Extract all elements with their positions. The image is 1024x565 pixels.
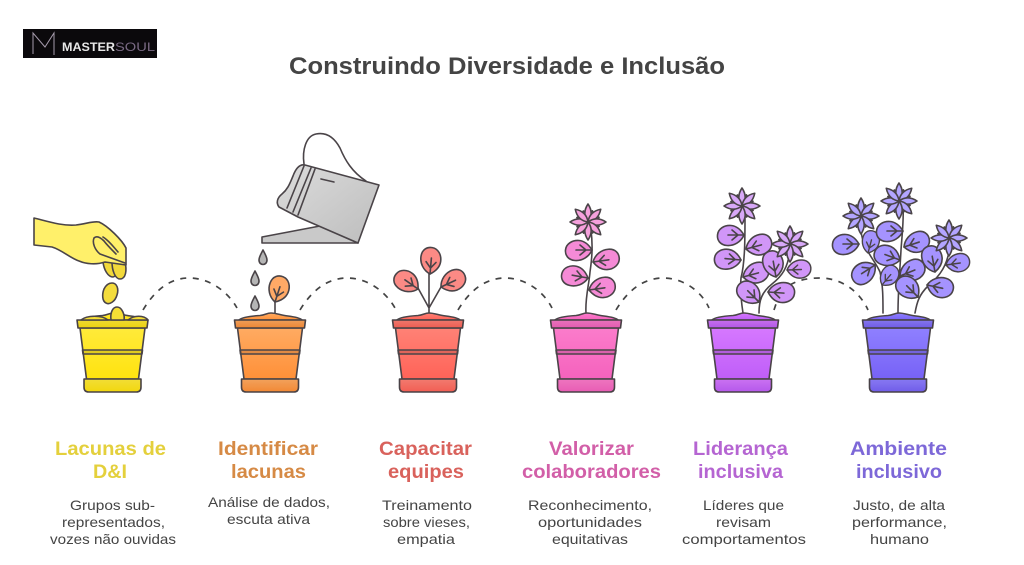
text block: Identificar lacunas: Identificar	[218, 439, 319, 460]
dashed connector arcs	[143, 278, 868, 310]
plant: blue stems with leaves	[832, 205, 971, 313]
pot: blue	[862, 313, 934, 392]
icon: falling seed	[103, 283, 118, 304]
plant: three-leaf seedling	[390, 247, 469, 313]
icon: pink flower	[570, 204, 606, 240]
text block: Valorizar colaboradores: oportunidades	[538, 514, 642, 530]
text block: Valorizar colaboradores: colaboradores	[522, 462, 661, 483]
text block: Ambiente inclusivo: Ambiente	[850, 439, 947, 460]
title: Construindo Diversidade e Inclusão	[289, 53, 725, 80]
logo: MASTER	[62, 42, 116, 54]
step 6: three-stem plant in blue pot	[832, 183, 971, 392]
plant: violet stems with leaves	[714, 215, 811, 313]
pot: yellow	[77, 313, 148, 392]
text block: Identificar lacunas: Análise de dados,	[208, 494, 330, 510]
icon: water drops	[251, 250, 267, 310]
text block: Liderança inclusiva: Liderança	[693, 439, 788, 460]
text block: Capacitar equipes: empatia	[397, 531, 455, 547]
text block: Valorizar colaboradores: Reconhecimento,	[528, 497, 652, 513]
pot: violet	[708, 313, 778, 392]
text block: Identificar lacunas	[208, 439, 330, 527]
text block: Lacunas de D&I: D&I	[93, 462, 127, 483]
icon: hand dropping seeds	[34, 218, 126, 279]
icon: violet flowers	[724, 188, 808, 262]
plant: pink stem with leaves	[560, 230, 621, 313]
step 1: hand and seeds over yellow pot	[34, 218, 148, 392]
text block: Ambiente inclusivo: humano	[870, 531, 929, 547]
text block: Lacunas de D&I	[50, 439, 176, 547]
text block: Identificar lacunas: escuta ativa	[227, 511, 310, 527]
text block: Ambiente inclusivo: inclusivo	[856, 462, 942, 483]
text block: Ambiente inclusivo	[850, 439, 947, 547]
logo	[23, 29, 157, 58]
text block: Lacunas de D&I: vozes não ouvidas	[50, 531, 176, 547]
pot: orange	[234, 313, 306, 392]
text block: Liderança inclusiva: inclusiva	[698, 462, 783, 483]
sprout	[265, 273, 292, 313]
text block: Liderança inclusiva: revisam	[716, 514, 771, 530]
text block: Capacitar equipes: equipes	[388, 462, 464, 483]
step 3: seedling in red pot	[390, 247, 469, 392]
text block: Capacitar equipes: Capacitar	[379, 439, 473, 460]
step 5: two-stem plant in violet pot	[708, 188, 811, 392]
logo: SOUL	[115, 42, 156, 54]
text block: Liderança inclusiva	[682, 439, 806, 547]
pot: pink	[550, 313, 622, 392]
text block: Liderança inclusiva: Líderes que	[703, 497, 784, 513]
icon: soil seeds	[81, 307, 148, 320]
text block: Lacunas de D&I: Grupos sub-	[70, 497, 155, 513]
text block: Valorizar colaboradores: Valorizar	[549, 439, 635, 460]
text block: Liderança inclusiva: comportamentos	[682, 531, 806, 547]
text block: Valorizar colaboradores	[522, 439, 661, 547]
pot: red	[392, 313, 464, 392]
text block: Ambiente inclusivo: performance,	[852, 514, 947, 530]
text block: Identificar lacunas: lacunas	[231, 462, 306, 483]
text block: Lacunas de D&I: representados,	[62, 514, 165, 530]
text block: Lacunas de D&I: Lacunas de	[55, 439, 166, 460]
text block: Capacitar equipes: sobre vieses,	[383, 514, 470, 530]
icon: blue flowers	[843, 183, 967, 256]
step 2: watering can over orange pot	[234, 134, 379, 392]
icon: watering can	[262, 134, 379, 243]
text block: Ambiente inclusivo: Justo, de alta	[853, 497, 945, 513]
text block: Valorizar colaboradores: equitativas	[552, 531, 628, 547]
text block: Capacitar equipes: Treinamento	[382, 497, 472, 513]
step 4: flowering plant in pink pot	[550, 204, 622, 392]
text block: Capacitar equipes	[379, 439, 473, 547]
